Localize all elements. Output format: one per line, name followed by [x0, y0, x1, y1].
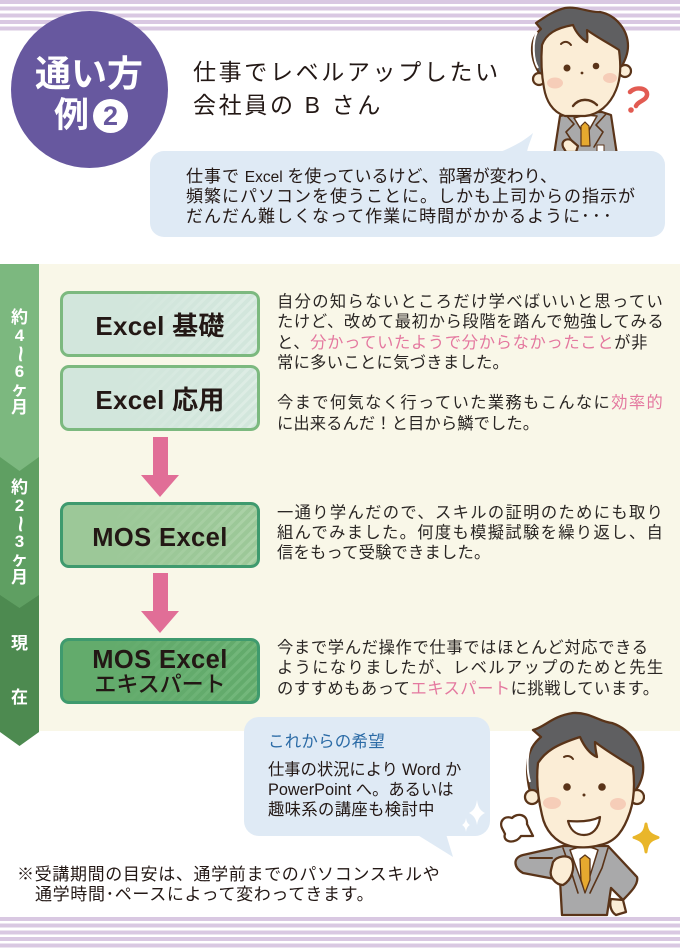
bubble text: だんだん難しくなって作業に時間がかかるように･･･: [186, 207, 614, 226]
box: Excel basics: Excel 基礎: [95, 311, 225, 341]
heading: 会社員の B さん: [193, 92, 383, 118]
badge line 2: 2: [103, 101, 118, 131]
expert title: MOS Excel: [92, 646, 228, 674]
icon: gold sparkle: [632, 822, 660, 854]
bubble heading: これからの希望: [268, 733, 385, 751]
box: Excel advanced: Excel 応用: [95, 385, 225, 415]
text block: MOS Excel: 信をもって受験できました。: [277, 544, 490, 562]
box: MOS Excel: MOS Excel: [92, 524, 228, 552]
bubble text: 仕事の状況によりWord か: [268, 761, 461, 779]
text block: expert: [277, 638, 665, 698]
icon: question mark: [628, 86, 650, 113]
text block: basics: たけど、改めて最初から段階を踏んで勉強してみる: [277, 313, 664, 331]
label: 4 to 6 months: 4: [15, 326, 24, 345]
label: 2 to 3 months: ヶ: [11, 550, 28, 569]
label: 4 to 6 months: ヶ: [11, 380, 28, 399]
timeline segments: [0, 264, 39, 746]
badge line 2: [54, 96, 128, 135]
box: MOS Excel Expert: [60, 638, 260, 704]
badge line 2: 例: [54, 96, 89, 135]
label: current (在): 在: [11, 688, 28, 707]
text block: MOS Excel: 組んでみました。何度も模擬試験を繰り返し、自: [277, 524, 664, 542]
heading: [193, 59, 501, 118]
text block: MOS Excel: 一通り学んだので、スキルの証明のためにも取り: [277, 504, 664, 522]
arrow 1: [141, 437, 179, 497]
bubble text: [268, 760, 461, 819]
character: worried businessman: [530, 6, 632, 151]
text block: basics: [277, 292, 664, 372]
label: 4 to 6 months: [8, 308, 33, 417]
text block: basics: と、分かっていたようで分からなかったことが非: [277, 334, 648, 352]
text block: basics: 常に多いことに気づきました。: [277, 354, 509, 372]
character: smiling businessman: [500, 712, 645, 916]
box: Excel basics: [60, 291, 260, 357]
label: 2 to 3 months: 2: [15, 496, 24, 515]
box: Excel advanced: [60, 365, 260, 431]
bubble text: 趣味系の講座も検討中: [268, 801, 435, 819]
text block: expert: ようになりましたが、レベルアップのためと先生: [277, 659, 665, 677]
badge: example 2: [11, 11, 168, 168]
timeline bar: [0, 264, 39, 746]
label: 2 to 3 months: 3: [15, 532, 24, 551]
label: 4 to 6 months: 約: [11, 308, 28, 327]
footnote: [17, 865, 440, 904]
speech bubble: future hopes: [244, 717, 490, 857]
speech bubble: situation: [150, 133, 665, 237]
label: 2 to 3 months: 月: [11, 568, 28, 587]
bubble body and tail: [244, 717, 490, 857]
label: 2 to 3 months: [8, 478, 33, 587]
footnote: ※受講期間の目安は、通学前までのパソコンスキルや: [17, 865, 440, 884]
text block: basics: 自分の知らないところだけ学べばいいと思ってい: [277, 293, 664, 311]
arrow 2: [141, 573, 179, 633]
label: 2 to 3 months: 約: [11, 478, 28, 497]
bubble text: PowerPoint へ。あるいは: [268, 781, 453, 799]
label: current (現): 現: [11, 634, 28, 653]
text block: advanced: に出来るんだ！と目から鱗でした。: [277, 415, 539, 433]
label: 4 to 6 months: 月: [11, 398, 28, 417]
label: 4 to 6 months: 6: [15, 362, 24, 381]
bottom stripes: [0, 917, 680, 948]
text block: MOS Excel: [277, 504, 664, 562]
box: MOS Excel: [60, 502, 260, 568]
text block: expert: 今まで学んだ操作で仕事ではほとんど対応できる: [277, 639, 649, 657]
bubble text: 仕事で Excel を使っているけど、部署が変わり、: [186, 167, 557, 186]
panel: cream timeline background: [39, 264, 680, 731]
footnote: 通学時間･ペースによって変わってきます。: [35, 885, 374, 904]
bubble tail: [503, 133, 533, 151]
label: 2 to 3 months: ~: [8, 516, 33, 532]
bubble text: [186, 167, 636, 226]
label: 4 to 6 months: ~: [8, 346, 33, 362]
bubble text: 頻繁にパソコンを使うことに。しかも上司からの指示が: [186, 187, 636, 206]
text block: expert: のすすめもあってエキスパートに挑戦しています。: [277, 680, 660, 698]
text block: advanced: 今まで何気なく行っていた業務もこんなに効率的: [277, 394, 664, 412]
expert subtitle: エキスパート: [94, 672, 226, 697]
top stripes: [0, 0, 680, 31]
text block: advanced: [277, 394, 664, 433]
heading: 仕事でレベルアップしたい: [193, 59, 501, 85]
badge line 1: 通い方: [35, 53, 143, 94]
